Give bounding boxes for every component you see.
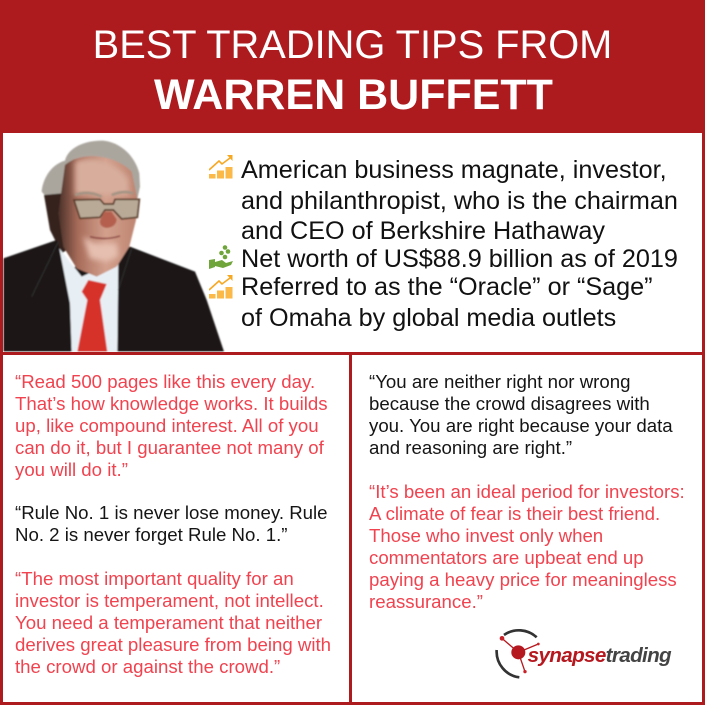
logo node network	[502, 638, 538, 672]
lapel detail	[32, 242, 132, 297]
forehead highlight	[75, 159, 129, 195]
quote: temperament: You need a temperament that neither	[15, 612, 322, 633]
mouth	[90, 236, 120, 239]
hair	[40, 140, 141, 198]
nose	[100, 212, 117, 228]
quote: read 500 pages: That’s how knowledge works. It builds	[15, 393, 328, 414]
quote: ideal period: A climate of fear is their best friend.	[369, 503, 660, 524]
glasses	[74, 199, 139, 219]
icon: hand with coins	[209, 245, 233, 269]
quote: read 500 pages	[15, 371, 328, 480]
suit	[3, 240, 224, 352]
title line 1: BEST TRADING TIPS FROM	[93, 23, 612, 67]
quote: ideal period: Those who invest only when	[369, 525, 603, 546]
quote: read 500 pages: can do it, but I guarantee not many of	[15, 437, 324, 458]
bio bullet 3	[241, 273, 653, 332]
quote: read 500 pages: you will do it.”	[15, 459, 128, 480]
quote: neither right nor wrong: “You are neither right nor wrong	[369, 371, 630, 392]
quote: temperament: “The most important quality for an	[15, 568, 294, 589]
logo: synapse trading	[495, 629, 672, 679]
portrait of Warren Buffett	[3, 140, 225, 352]
divider under bio	[0, 352, 705, 355]
title line 2: WARREN BUFFETT	[154, 71, 553, 119]
quote: ideal period: paying a heavy price for meaningless	[369, 569, 677, 590]
quote: neither right nor wrong	[369, 371, 673, 458]
quote: ideal period: reassurance.”	[369, 591, 483, 612]
quote: temperament: the crowd or against the crowd.”	[15, 656, 280, 677]
quote: ideal period: commentators are upbeat end up	[369, 547, 644, 568]
bio bullet 3: of Omaha by global media outlets	[241, 304, 616, 332]
shirt	[59, 248, 118, 352]
quote: read 500 pages: “Read 500 pages like this every day.	[15, 371, 315, 392]
tie	[77, 280, 107, 352]
eyebrows	[75, 192, 133, 197]
logo wordmark: synapsetrading	[528, 644, 672, 667]
icon: rising chart with coins 2	[209, 275, 232, 298]
bio bullet 1	[241, 156, 678, 245]
quote: ideal period	[369, 481, 685, 612]
frame bottom	[0, 702, 705, 705]
cheek highlight	[83, 237, 118, 262]
quote: temperament	[15, 568, 331, 677]
quote: neither right nor wrong: you. You are right because your data	[369, 415, 673, 436]
quote: neither right nor wrong: because the crowd disagrees with	[369, 393, 650, 414]
quote: neither right nor wrong: and reasoning are right.”	[369, 437, 572, 458]
quote: rule no. 1	[15, 502, 328, 545]
quote: read 500 pages: up, like compound interest. All of you	[15, 415, 319, 436]
logo ring	[497, 630, 537, 677]
bio bullet 3: Referred to as the “Oracle” or “Sage”	[241, 273, 653, 301]
bio bullet 1: American business magnate, investor,	[241, 156, 667, 184]
face	[58, 156, 137, 277]
icon: rising chart with coins 1	[209, 155, 232, 178]
quote: temperament: investor is temperament, not intellect.	[15, 590, 324, 611]
bio bullet 1: and CEO of Berkshire Hathaway	[241, 217, 605, 245]
divider between quote columns	[349, 352, 352, 703]
header banner	[0, 0, 705, 133]
frame right	[702, 133, 705, 705]
bio bullet 2: Net worth of US$88.9 billion as of 2019	[241, 245, 678, 273]
quote: temperament: derives great pleasure from being with	[15, 634, 331, 655]
frame left	[0, 133, 3, 705]
quote: rule no. 1: “Rule No. 1 is never lose money. Rule	[15, 502, 328, 523]
quote: ideal period: “It’s been an ideal period for investors:	[369, 481, 685, 502]
quote: rule no. 1: No. 2 is never forget Rule No. 1.”	[15, 524, 287, 545]
bio bullet 1: and philanthropist, who is the chairman	[241, 186, 678, 214]
ear and neck shadow	[43, 192, 66, 254]
